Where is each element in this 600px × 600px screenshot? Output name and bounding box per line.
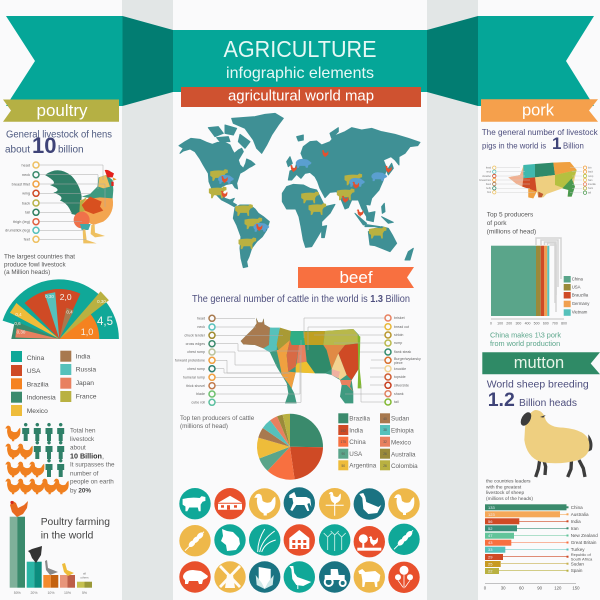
- icon: cow: [179, 488, 211, 519]
- legend: fowl countries: Mexico: [27, 408, 48, 415]
- rooster diagram: wing: [22, 192, 30, 196]
- title: AGRICULTURE: [224, 36, 376, 62]
- bar chart: sheep: Turkey: [571, 547, 585, 552]
- rooster diagram: neck: [22, 173, 30, 177]
- cow diagram: cube roll: [191, 400, 205, 404]
- bar chart: sheep: Republic of: [571, 552, 592, 557]
- bar chart: sheep: 90: [537, 586, 543, 590]
- world map: [179, 113, 420, 268]
- text: total hen livestock: It surpasses the: [70, 462, 115, 469]
- rooster diagram: tail: [25, 211, 30, 215]
- cow diagram: piece: [394, 361, 403, 365]
- bar chart: sheep: 133: [488, 505, 495, 510]
- pig diagram: forward loin: [479, 179, 492, 182]
- bar chart: sheep: China: [571, 505, 583, 510]
- text: china pork share: [490, 330, 561, 348]
- pig diagram: loin: [588, 168, 592, 170]
- text: top ten cattle: Top ten producers of cattle: [180, 415, 255, 422]
- text: sheep breeding: 1.2: [488, 389, 515, 411]
- rooster diagram: [5, 162, 117, 243]
- text: fowl countries intro: produce fowl livestock: [4, 262, 66, 269]
- icon: farm house: [284, 524, 315, 556]
- cow diagram: tail: [394, 400, 399, 404]
- icon: flowers: [388, 562, 420, 593]
- fan chart: fowl livestock: 0,30: [97, 299, 106, 304]
- text: top 5 pork: Top 5 producers: [487, 212, 534, 219]
- chart: pork producers: 500: [534, 322, 540, 326]
- heading: poultry: poultry: [36, 101, 88, 120]
- cow diagram: chest rump: [187, 367, 205, 371]
- text: total hen livestock: by 20%: [70, 488, 91, 495]
- pig diagram: shoulder: [482, 175, 491, 178]
- legend: fowl countries: France: [76, 394, 97, 400]
- text: sheep leaders: (millions of the heads): [486, 496, 533, 502]
- legend: pork: [564, 276, 590, 316]
- icon: windmill: [214, 561, 246, 593]
- legend: fowl countries: Brazilia: [27, 382, 49, 388]
- bar chart: poultry farming: 10%: [47, 591, 55, 595]
- fan chart: fowl livestock: 1,0: [81, 327, 93, 337]
- bar chart: sheep: 33: [488, 547, 493, 552]
- cow diagram: thick shovel: [186, 384, 205, 388]
- heading: poultry farming: in the world: [41, 530, 94, 541]
- pig diagram: neck: [486, 172, 492, 174]
- bar chart: sheep: 25: [488, 562, 493, 566]
- pie chart: cattle: [257, 414, 323, 480]
- bar chart: poultry farming: all: [83, 572, 86, 576]
- text: total hen livestock: Total hen: [70, 428, 96, 435]
- cow diagram: blade: [196, 392, 205, 396]
- rooster diagram: drumstick (leg): [5, 229, 31, 233]
- text: hens livestock: billion: [58, 145, 84, 156]
- cow diagram: topside: [394, 375, 406, 379]
- title: [224, 36, 376, 82]
- legend: fowl countries: China: [27, 355, 44, 362]
- text: sheep breeding: [487, 379, 589, 411]
- bar chart: poultry farming: 50%: [14, 591, 21, 595]
- rooster diagram: head: [22, 163, 30, 167]
- text: total hen livestock: livestock: [70, 436, 95, 443]
- text: china pork share: from world production: [490, 339, 560, 348]
- text: pigs number: pigs in the world is: [482, 141, 546, 150]
- cow diagram: chuck tender: [184, 334, 206, 338]
- cow diagram: flank steak: [394, 350, 411, 354]
- icon: barn: [214, 488, 246, 519]
- heading: mutton: mutton: [514, 354, 564, 372]
- cow diagram: shank: [394, 392, 404, 396]
- text: fowl countries intro: The largest countries that: [4, 253, 75, 260]
- legend: cattle: India: [349, 428, 363, 434]
- rooster diagram: back: [22, 201, 30, 205]
- legend: fowl countries: Indonesia: [27, 394, 56, 402]
- rooster diagram: feet: [24, 238, 31, 242]
- text: hens livestock: 10: [32, 133, 56, 158]
- bar chart: sheep: Australia: [571, 512, 589, 517]
- chart: pork producers: 200: [506, 322, 512, 326]
- legend: cattle: Sudan: [391, 416, 410, 422]
- cow diagram: silverside: [394, 384, 409, 388]
- title: infographic elements: [226, 65, 374, 82]
- icon: hen: [388, 488, 420, 520]
- legend: cattle: 26: [383, 464, 387, 468]
- icon: horse: [284, 487, 315, 519]
- pig diagram: hock: [588, 188, 594, 190]
- cow diagram: bread cut: [394, 325, 409, 329]
- heading: poultry farming: [41, 517, 110, 541]
- bar chart: sheep: 22: [488, 568, 493, 574]
- chart: pork producers: 700: [552, 322, 558, 326]
- icon: goose: [354, 488, 385, 520]
- pig diagram: hand: [486, 184, 492, 186]
- text: top ten cattle: (millions of head): [180, 423, 228, 430]
- icon: corn: [249, 561, 280, 593]
- icon: weather vane: [319, 488, 350, 519]
- bar chart: sheep: 47: [488, 533, 493, 538]
- icon: grain: [249, 524, 280, 556]
- fan chart: fowl livestock: 2,0: [60, 292, 72, 302]
- heading: pork: [481, 99, 598, 122]
- heading: agricultural world map: [181, 87, 421, 107]
- pig diagram: head: [486, 168, 492, 170]
- pig diagram: foot: [487, 191, 491, 194]
- text: sheep leaders: the countries leaders: [486, 479, 531, 485]
- legend: fowl countries: [11, 351, 97, 416]
- cow diagram: cross edges: [186, 342, 205, 346]
- text: sheep leaders: livestock of sheep: [486, 490, 524, 496]
- bar chart: sheep: 29: [488, 554, 493, 560]
- chart: pork producers: 300: [515, 322, 521, 326]
- legend: cattle: Brazilia: [349, 416, 370, 422]
- text: top 5 pork: of pork: [487, 220, 507, 227]
- text: top ten cattle: [180, 415, 255, 430]
- bar chart: sheep: India: [571, 519, 581, 524]
- chart: pork producers: 100: [497, 322, 503, 326]
- fan chart: fowl livestock: 0,6: [14, 321, 21, 326]
- text: hens livestock: General livestock of hens: [6, 130, 112, 141]
- cow diagram: head: [197, 316, 205, 320]
- bar chart: sheep: 56: [488, 519, 493, 524]
- legend: cattle: 26: [383, 452, 387, 456]
- chart: pork producers: 0: [490, 322, 492, 326]
- text: pigs number: 1: [552, 134, 561, 153]
- legend: cattle: USA: [349, 451, 363, 458]
- legend: cattle: 192: [341, 429, 346, 433]
- legend: pork: Vietnam: [572, 310, 588, 314]
- icon: wheat: [179, 525, 211, 556]
- cow diagram: knuckle: [394, 367, 406, 371]
- legend: cattle: Ethiopia: [391, 428, 414, 434]
- text: sheep breeding: Billion heads: [519, 398, 577, 409]
- text: sheep leaders: with the greatest: [486, 484, 522, 490]
- pig diagram: knuckle: [588, 184, 597, 186]
- icon: wind turbines: [319, 524, 350, 556]
- cow diagram: Burger/wydarsky: [394, 357, 421, 361]
- icon grid: [179, 487, 420, 593]
- chart: pork producers: 400: [525, 322, 530, 326]
- icon: swan goose: [284, 561, 315, 593]
- legend: cattle: 38: [383, 428, 387, 432]
- legend: cattle: Colombia: [391, 463, 418, 470]
- text: total hen livestock: about: [70, 444, 86, 451]
- bar chart: poultry farming: [10, 501, 92, 595]
- cow diagram: forward proteidone: [175, 358, 205, 362]
- legend: cattle: 90: [342, 452, 345, 456]
- fan chart: fowl livestock: 0,4: [15, 312, 22, 317]
- legend: pork: China: [572, 276, 584, 282]
- icon: wheat ear: [388, 524, 420, 555]
- legend: fowl countries: Russia: [76, 366, 96, 374]
- bar chart: sheep: 43: [488, 540, 493, 545]
- text: fowl countries intro: (a Million heads): [4, 269, 50, 276]
- text: sheep leaders: [486, 479, 533, 502]
- legend: pork: Germany: [572, 301, 590, 306]
- legend: cattle: 32: [383, 440, 387, 444]
- cow diagram: humeral rump: [183, 376, 205, 380]
- fan chart: fowl livestock: 0,30: [17, 330, 26, 334]
- text: fowl countries intro: [4, 253, 75, 276]
- chart: pork producers: 600: [543, 322, 549, 326]
- text: pigs number: The general number of livestock: [482, 127, 598, 137]
- text: total hen livestock: number of: [70, 470, 99, 477]
- bar chart: poultry farming: 20%: [30, 591, 38, 595]
- cow diagram: brisket: [394, 316, 405, 320]
- heading: mutton: [482, 352, 600, 374]
- legend: fowl countries: Japan: [76, 380, 94, 387]
- text: china pork share: China makes 1\3 pork: [490, 330, 561, 339]
- legend: cattle: Argentina: [349, 462, 377, 470]
- heading: pork: pork: [522, 102, 555, 120]
- pig diagram: back: [588, 172, 594, 174]
- fan chart: fowl livestock: [3, 279, 119, 339]
- cow diagram: rump: [394, 341, 402, 345]
- text: total hen livestock: [70, 428, 115, 495]
- bar chart: sheep: [484, 504, 598, 590]
- chart: pork producers: 800: [561, 322, 567, 326]
- bar chart: sheep: New Zealand: [571, 533, 598, 538]
- bar chart: sheep: Iran: [571, 526, 579, 531]
- cow diagram: sirloin: [394, 333, 403, 337]
- pig diagram: tail: [588, 191, 591, 194]
- bar chart: poultry farming: others: [80, 576, 89, 580]
- pictogram: hens vs people: [5, 423, 69, 494]
- icon: pig: [179, 561, 211, 593]
- rooster diagram: breast fillet: [12, 182, 31, 186]
- fan chart: fowl livestock: 0,4: [66, 310, 73, 314]
- pig diagram: ham: [588, 180, 593, 182]
- legend: cattle: 175: [341, 440, 346, 444]
- icon: tractor: [319, 561, 350, 593]
- icon: sheep: [354, 561, 385, 593]
- bar chart: sheep: South Africa: [571, 556, 593, 562]
- legend: pork: Brauzilia: [572, 292, 589, 298]
- text: total hen livestock: people on earth: [70, 479, 114, 486]
- icon: rooster: [249, 488, 280, 520]
- legend: pork: USA: [572, 284, 581, 290]
- bar chart: sheep: 123: [488, 512, 495, 517]
- heading: poultry farming: Poultry farming: [41, 517, 110, 528]
- legend: cattle: Mexico: [391, 440, 411, 446]
- cow diagram: neck: [197, 325, 205, 329]
- legend: cattle: Australia: [391, 452, 416, 458]
- pig diagram: [479, 162, 597, 198]
- text: top 5 pork: [487, 212, 536, 235]
- pig diagram: rump: [588, 175, 594, 178]
- text: top 5 pork: (millions of head): [487, 228, 536, 235]
- pig diagram: belly: [486, 188, 492, 190]
- text: hens livestock: [5, 130, 112, 158]
- bar chart: poultry farming: 10%: [64, 591, 71, 595]
- text: total hen livestock: 10 Billion,: [70, 451, 104, 460]
- bar chart: sheep: 30: [501, 586, 506, 590]
- legend: cattle: China: [349, 439, 366, 446]
- fan chart: fowl livestock: 0,30: [45, 294, 54, 299]
- legend: cattle: [338, 413, 418, 470]
- legend: cattle: 40: [383, 417, 387, 421]
- icon: turkey: [214, 524, 246, 556]
- bar chart: sheep: Sudan: [571, 562, 584, 566]
- text: pigs number: Billion: [563, 141, 584, 150]
- chart: pork producers: [490, 238, 567, 326]
- heading: beef: beef: [339, 268, 373, 287]
- icon: sheep: [519, 410, 592, 477]
- icon: plants: [354, 526, 385, 557]
- text: hens livestock: about: [5, 145, 30, 156]
- fan chart: fowl livestock: 4,5: [97, 316, 113, 328]
- cow diagram: [175, 315, 421, 405]
- bar chart: sheep: 60: [519, 586, 524, 590]
- text: sheep breeding: World sheep breeding: [487, 379, 589, 391]
- rooster diagram: thigh (leg): [13, 220, 31, 224]
- bar chart: sheep: 52: [488, 526, 493, 531]
- heading: beef: [298, 267, 414, 288]
- bar chart: sheep: 120: [554, 586, 562, 590]
- bar chart: poultry farming: 5%: [82, 591, 87, 595]
- bar chart: sheep: Spain: [571, 568, 583, 573]
- legend: fowl countries: India: [76, 354, 90, 360]
- heading: agricultural world map: agricultural world map: [228, 88, 374, 104]
- heading: poultry: [3, 100, 119, 122]
- bar chart: sheep: 0: [484, 586, 487, 590]
- cow diagram: chest rump: [187, 350, 205, 354]
- bar chart: sheep: Great Britain: [571, 540, 597, 545]
- bar chart: sheep: 150: [572, 586, 580, 590]
- title ribbon: [6, 16, 594, 106]
- legend: fowl countries: USA: [27, 368, 41, 375]
- text: cattle number: The general number of cattle in the world is 1.3 Billion: [192, 293, 410, 305]
- text: pigs number: [482, 127, 598, 153]
- legend: cattle: 50: [342, 464, 345, 468]
